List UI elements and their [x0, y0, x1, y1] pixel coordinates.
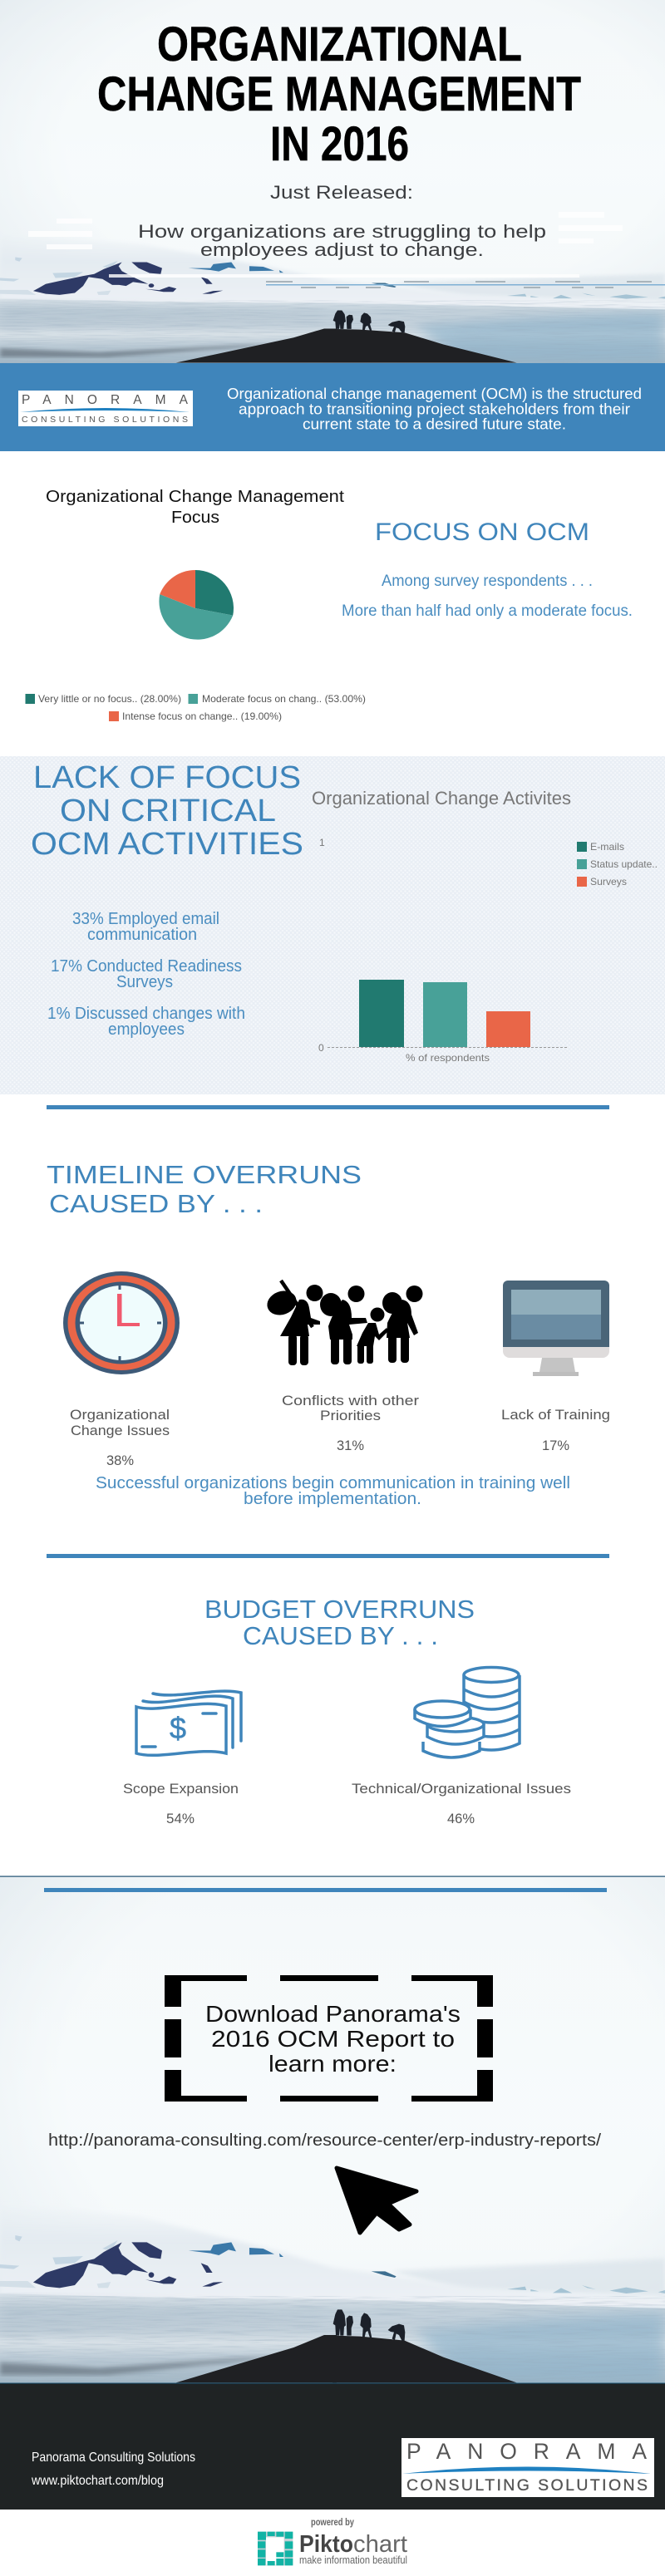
timeline takeaway text	[96, 1474, 570, 1508]
timeline cause labels: 31%	[337, 1438, 364, 1453]
pie legend: Moderate focus on chang.. (53.00%)	[202, 693, 366, 705]
subtitle text: How organizations are struggling to help	[138, 221, 546, 242]
activity statistics: employees	[108, 1020, 185, 1039]
footer text	[31, 2451, 195, 2488]
subtitle text: employees adjust to change.	[200, 239, 484, 260]
chart title	[46, 488, 344, 527]
icon: cursor arrow	[337, 2168, 416, 2233]
powered by text: powered by	[311, 2516, 354, 2528]
panel: Piktochart branding	[258, 2516, 407, 2566]
title: ORGANIZATIONAL	[157, 17, 522, 71]
budget cause labels: Technical/Organizational Issues	[352, 1781, 571, 1797]
timeline cause labels: Priorities	[320, 1408, 381, 1423]
panel: download call to action	[0, 1876, 665, 2383]
budget cause labels: 46%	[447, 1811, 475, 1826]
logo: Panorama: CONSULTING SOLUTIONS	[22, 415, 188, 425]
background photo: glacier and hikers	[0, 0, 665, 363]
timeline cause labels: 17%	[542, 1438, 569, 1453]
heading: focus on OCM: FOCUS ON OCM	[375, 519, 589, 546]
activity statistics	[47, 910, 245, 1039]
intro text: Organizational change management (OCM) is the structured	[227, 386, 642, 402]
pie legend: Very little or no focus.. (28.00%)	[38, 693, 181, 705]
icon: money: $	[170, 1711, 186, 1745]
heading: budget overruns: CAUSED BY . . .	[243, 1621, 438, 1650]
subtitle text	[138, 182, 546, 260]
logo: Panorama: CONSULTING SOLUTIONS	[406, 2476, 648, 2495]
budget cause labels	[123, 1781, 571, 1826]
bar chart: activities: % of respondents	[406, 1052, 490, 1064]
timeline cause labels: Organizational	[70, 1407, 170, 1423]
icon: coins	[415, 1667, 520, 1757]
tagline: make information beautiful	[299, 2554, 407, 2566]
timeline takeaway text: before implementation.	[244, 1490, 421, 1508]
title: CHANGE MANAGEMENT	[97, 67, 581, 121]
decorative streak line	[266, 282, 665, 288]
bar chart: activities: Status update..	[590, 858, 658, 870]
intro text: approach to transitioning project stakeholders from their	[239, 401, 630, 417]
timeline cause labels: Conflicts with other	[282, 1393, 419, 1408]
heading: timeline overruns: TIMELINE OVERRUNS	[47, 1160, 362, 1189]
heading: budget overruns	[204, 1595, 475, 1650]
focus text: More than half had only a moderate focus.	[342, 602, 633, 620]
report URL: http://panorama-consulting.com/resource-center/erp-industry-reports/	[48, 2131, 601, 2150]
timeline cause labels: Lack of Training	[501, 1407, 610, 1423]
logo: Panorama: PANORAMA	[22, 393, 189, 407]
icon: monitor	[503, 1281, 609, 1376]
activity statistics: communication	[87, 926, 197, 944]
timeline cause labels: 38%	[106, 1453, 134, 1468]
icon: people carrying bags	[264, 1281, 422, 1365]
icon: money	[136, 1691, 241, 1755]
intro text: current state to a desired future state.	[303, 415, 566, 432]
panel: focus on OCM	[25, 488, 633, 722]
logo: Piktochart mark	[258, 2532, 293, 2565]
logo: Piktochart wordmark	[299, 2531, 407, 2558]
intro text	[227, 386, 642, 432]
heading: lack of focus: ON CRITICAL	[60, 794, 276, 828]
title: IN 2016	[270, 117, 409, 171]
heading: lack of focus	[31, 760, 303, 862]
heading: lack of focus: LACK OF FOCUS	[33, 760, 301, 795]
panel: lack of focus	[0, 756, 665, 1094]
panel: intro band	[0, 363, 665, 451]
download text: learn more:	[268, 2051, 397, 2077]
logo: Panorama	[18, 391, 193, 426]
bar chart: activities: 1	[319, 837, 325, 848]
icon: clock	[63, 1271, 180, 1374]
bar chart: activities: E-mails	[590, 841, 624, 853]
subtitle text: Just Released:	[270, 182, 413, 203]
heading: timeline overruns: CAUSED BY . . .	[49, 1189, 263, 1218]
budget cause labels: 54%	[166, 1811, 195, 1826]
pie legend: Intense focus on change.. (19.00%)	[122, 710, 282, 722]
panel: footer	[0, 2383, 665, 2510]
dashed bracket frame	[165, 1975, 493, 2102]
logo: Panorama: PANORAMA	[406, 2439, 647, 2464]
bar chart: activities: Surveys	[590, 876, 627, 887]
download text: Download Panorama's	[205, 2001, 461, 2027]
panel: hero	[0, 0, 665, 363]
download text	[205, 2001, 461, 2077]
pie chart	[159, 570, 234, 640]
logo: Piktochart wordmark: chart	[353, 2531, 407, 2558]
heading: lack of focus: OCM ACTIVITIES	[31, 827, 303, 862]
bar chart: activities	[312, 788, 658, 1064]
activity statistics: Surveys	[116, 973, 173, 991]
chart title: Focus	[171, 509, 219, 527]
timeline cause labels	[70, 1393, 610, 1468]
download text: 2016 OCM Report to	[211, 2026, 455, 2052]
footer text: www.piktochart.com/blog	[31, 2474, 164, 2488]
background photo: glacier and hikers	[0, 1876, 665, 2383]
bar chart: activities: 0	[318, 1042, 324, 1054]
logo: Piktochart wordmark: Pikto	[299, 2531, 353, 2558]
focus text	[342, 573, 633, 620]
activity statistics: 1% Discussed changes with	[47, 1005, 245, 1023]
logo: Panorama	[401, 2438, 654, 2497]
focus text: Among survey respondents . . .	[382, 573, 593, 590]
heading: budget overruns: BUDGET OVERRUNS	[204, 1595, 475, 1624]
timeline takeaway text: Successful organizations begin communication in training well	[96, 1474, 570, 1492]
bar chart: activities: Organizational Change Activites	[312, 788, 571, 809]
activity statistics: 33% Employed email	[72, 910, 219, 928]
budget cause labels: Scope Expansion	[123, 1781, 239, 1797]
pie legend	[25, 693, 366, 722]
footer text: Panorama Consulting Solutions	[32, 2451, 195, 2465]
title	[97, 17, 581, 171]
heading: timeline overruns	[47, 1160, 362, 1218]
timeline cause labels: Change Issues	[71, 1423, 170, 1438]
panel: budget overruns	[123, 1595, 571, 1826]
decorative white bars	[28, 212, 623, 278]
panel: timeline overruns	[47, 1160, 610, 1508]
chart title: Organizational Change Management	[46, 488, 344, 506]
activity statistics: 17% Conducted Readiness	[51, 957, 242, 976]
